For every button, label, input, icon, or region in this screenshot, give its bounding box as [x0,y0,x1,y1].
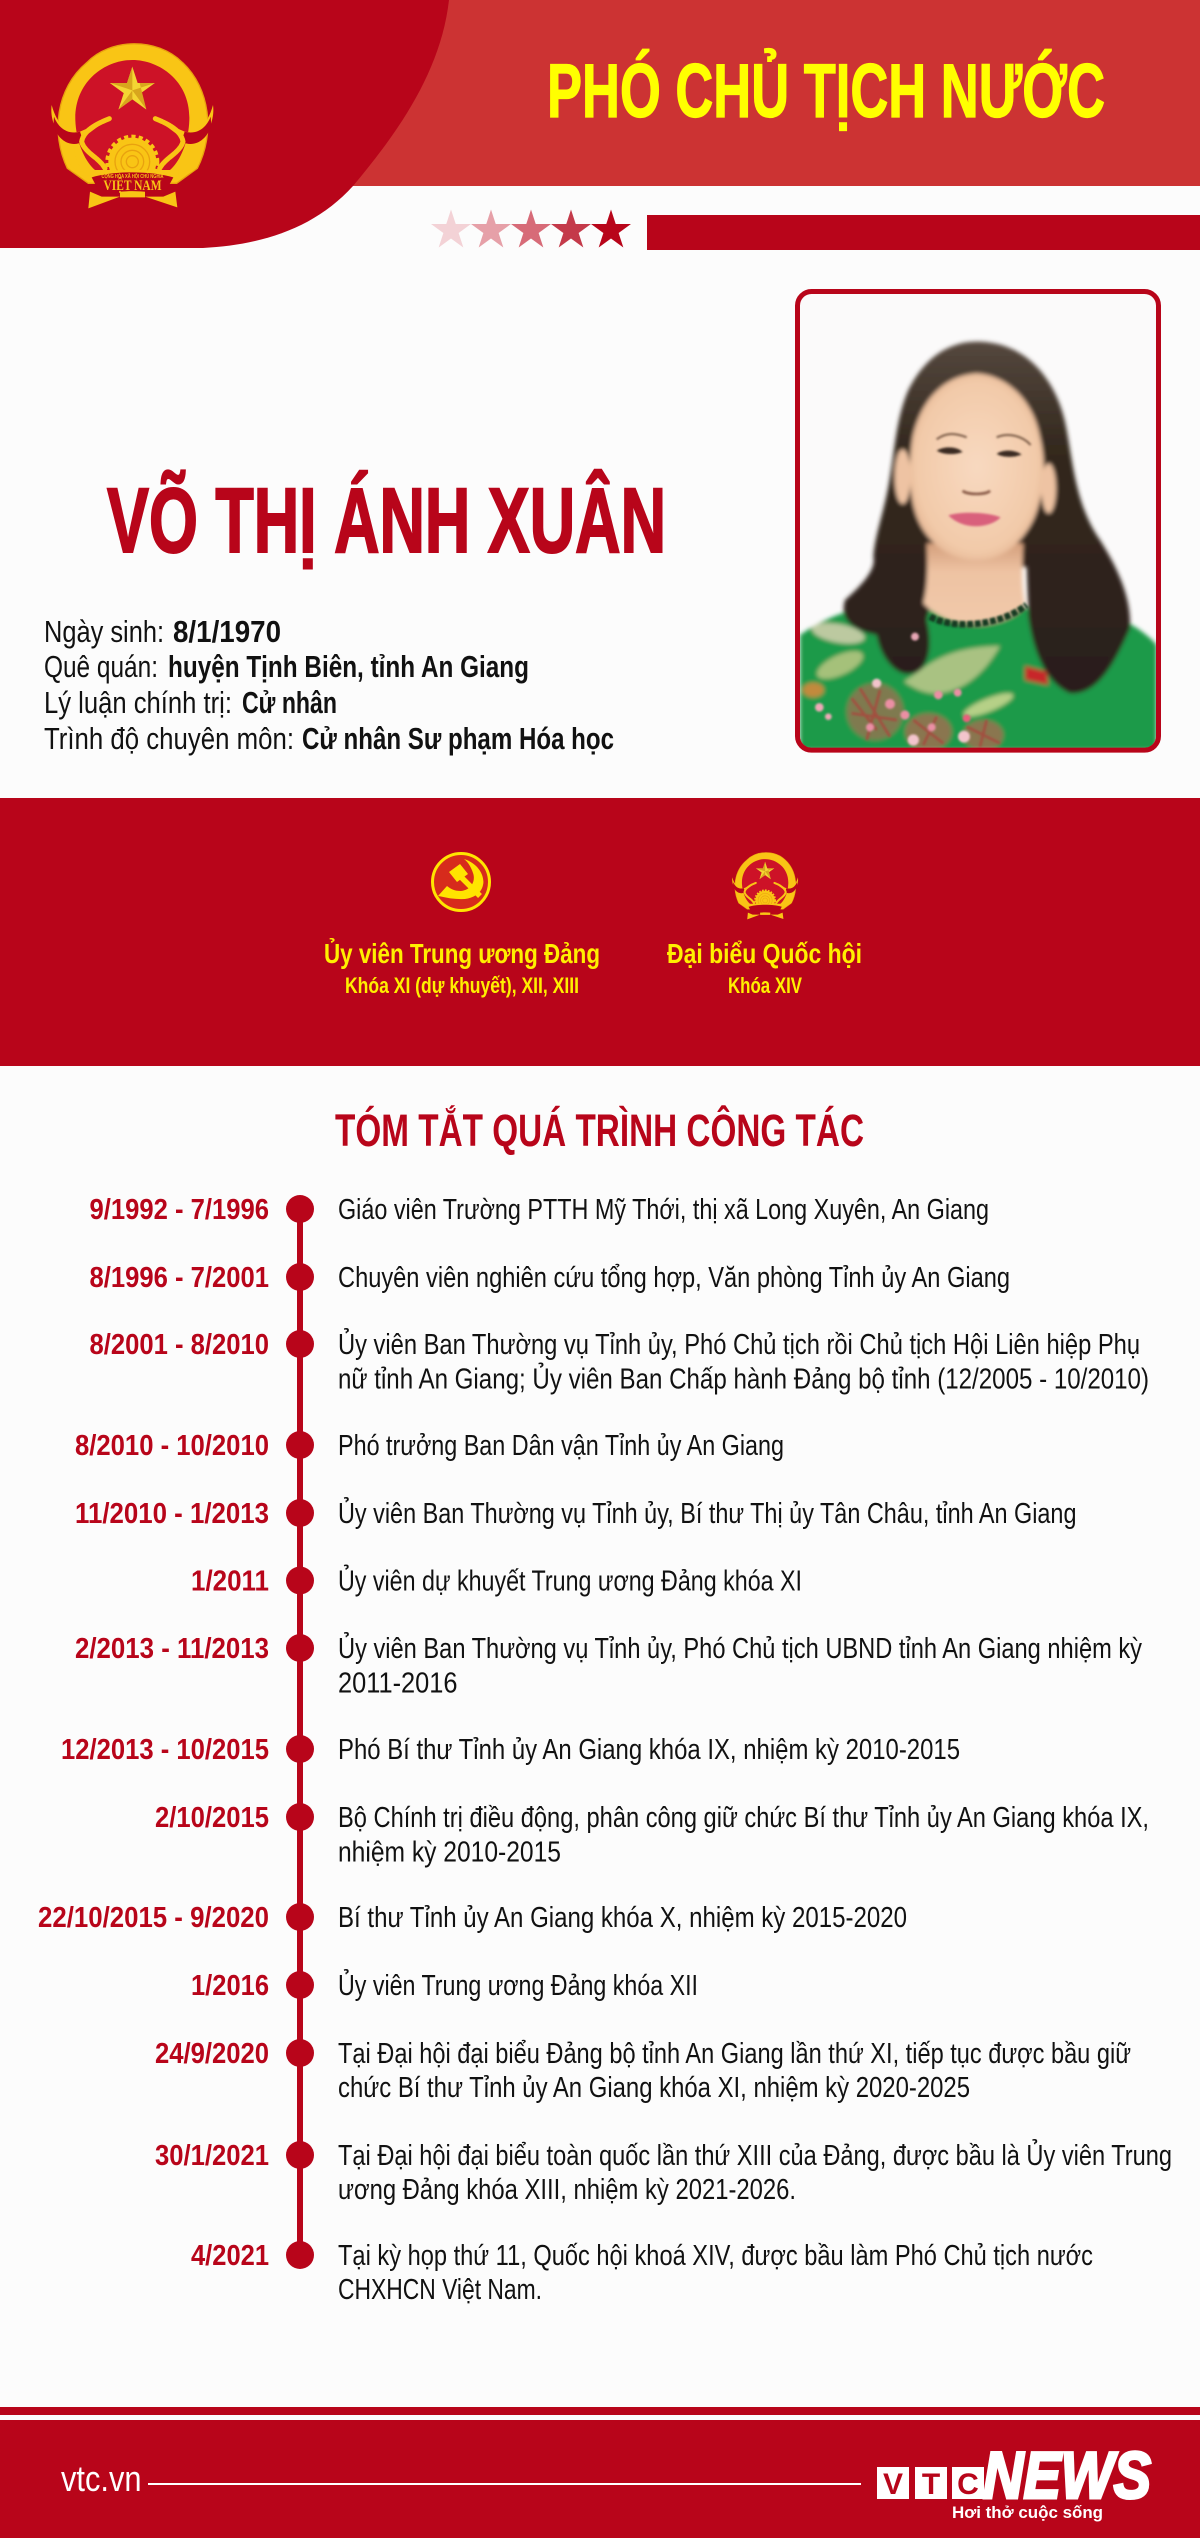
timeline item 2 [90,1262,1010,1294]
header bar [647,215,1200,250]
timeline item 1: Giáo viên Trường PTTH Mỹ Thới, thị xã Long Xuyên, An Giang [338,1194,989,1226]
timeline item 6: 1/2011 [191,1566,269,1598]
personal details: Cử nhân [242,685,337,720]
header [0,0,1200,250]
timeline item 9: nhiệm kỳ 2010-2015 [338,1836,561,1868]
timeline item 1 [90,1194,989,1226]
name: VÕ THỊ ÁNH XUÂN [107,469,666,572]
timeline item 2: 8/1996 - 7/2001 [90,1262,269,1294]
portrait photo [797,291,1158,750]
icon: hammer and sickle [432,854,490,910]
timeline item 5 [75,1496,1076,1530]
stars [431,210,631,247]
panel: positions [0,798,1200,1066]
timeline item 4: 8/2010 - 10/2010 [75,1430,269,1462]
timeline item 8: Phó Bí thư Tỉnh ủy An Giang khóa IX, nhiệm kỳ 2010-2015 [338,1734,960,1766]
timeline item 11 [191,1968,698,2002]
timeline item 12 [155,2038,1131,2104]
personal details: Quê quán: [44,649,158,684]
logo: VTC News: Hơi thở cuộc sống [952,2503,1103,2522]
timeline item 11: Ủy viên Trung ương Đảng khóa XII [338,1968,698,2002]
timeline item 14: 4/2021 [191,2240,269,2272]
label: national assembly: Khóa XIV [728,973,802,998]
timeline item 9 [155,1802,1149,1868]
logo: VTC News: NEWS [983,2438,1151,2512]
logo: VTC News [877,2438,1151,2522]
timeline item 8 [61,1734,960,1766]
timeline item 3: 8/2001 - 8/2010 [90,1329,269,1361]
timeline item 11: 1/2016 [191,1970,269,2002]
icon: national emblem [51,44,213,208]
timeline item 14 [191,2240,1093,2306]
timeline item 7: 2011-2016 [338,1668,458,1700]
footer [0,2407,1200,2538]
label: national assembly [667,938,862,998]
section heading: TÓM TẮT QUÁ TRÌNH CÔNG TÁC [335,1105,864,1156]
timeline item 5: 11/2010 - 1/2013 [75,1498,269,1530]
timeline item 13 [155,2138,1172,2206]
timeline item 13: ương Đảng khóa XIII, nhiệm kỳ 2021-2026. [338,2174,796,2206]
timeline item 1: 9/1992 - 7/1996 [90,1194,269,1226]
timeline item 12: chức Bí thư Tỉnh ủy An Giang khóa XI, nhiệm kỳ 2020-2025 [338,2072,970,2104]
personal details: Trình độ chuyên môn: [44,721,294,756]
header band [0,0,1200,186]
header curved red panel [0,0,449,248]
timeline item 4 [75,1430,784,1462]
personal details: Ngày sinh: [44,614,164,649]
personal details [44,614,614,756]
logo: VTC News: T [922,2468,940,2501]
timeline item 7 [75,1631,1142,1700]
timeline [38,1194,1172,2306]
timeline item 3 [90,1327,1149,1396]
timeline item 6 [191,1564,802,1598]
timeline item 10 [38,1902,907,1934]
footer site name: vtc.vn [61,2458,142,2499]
personal details: 8/1/1970 [173,614,281,649]
timeline item 2: Chuyên viên nghiên cứu tổng hợp, Văn phòng Tỉnh ủy An Giang [338,1262,1010,1294]
icon: national emblem: CỘNG HÒA XÃ HỘI CHỦ NGHĨA [102,172,164,180]
timeline item 14: CHXHCN Việt Nam. [338,2274,542,2306]
timeline item 12: 24/9/2020 [155,2038,269,2070]
label: party committee: Ủy viên Trung ương Đảng [324,937,600,969]
label: national assembly: Đại biểu Quốc hội [667,938,862,969]
logo: VTC News: V [883,2468,903,2501]
timeline item 9: 2/10/2015 [155,1802,269,1834]
label: party committee: Khóa XI (dự khuyết), XII, XIII [345,973,579,998]
timeline item 10: 22/10/2015 - 9/2020 [38,1902,269,1934]
timeline item 13: 30/1/2021 [155,2140,269,2172]
personal details: Cử nhân Sư phạm Hóa học [302,721,614,756]
timeline item 7: 2/2013 - 11/2013 [75,1633,269,1665]
icon: national emblem: VIỆT NAM [104,177,162,194]
personal details: huyện Tịnh Biên, tỉnh An Giang [168,649,529,684]
logo: VTC News: C [957,2468,979,2501]
timeline item 4: Phó trưởng Ban Dân vận Tỉnh ủy An Giang [338,1430,784,1462]
label: party committee [324,937,600,998]
timeline item 10: Bí thư Tỉnh ủy An Giang khóa X, nhiệm kỳ 2015-2020 [338,1902,907,1934]
timeline item 6: Ủy viên dự khuyết Trung ương Đảng khóa XI [338,1564,802,1598]
timeline item 8: 12/2013 - 10/2015 [61,1734,269,1766]
timeline axis [297,1209,303,2255]
icon: small national emblem [732,852,798,919]
personal details: Lý luận chính trị: [44,685,232,720]
